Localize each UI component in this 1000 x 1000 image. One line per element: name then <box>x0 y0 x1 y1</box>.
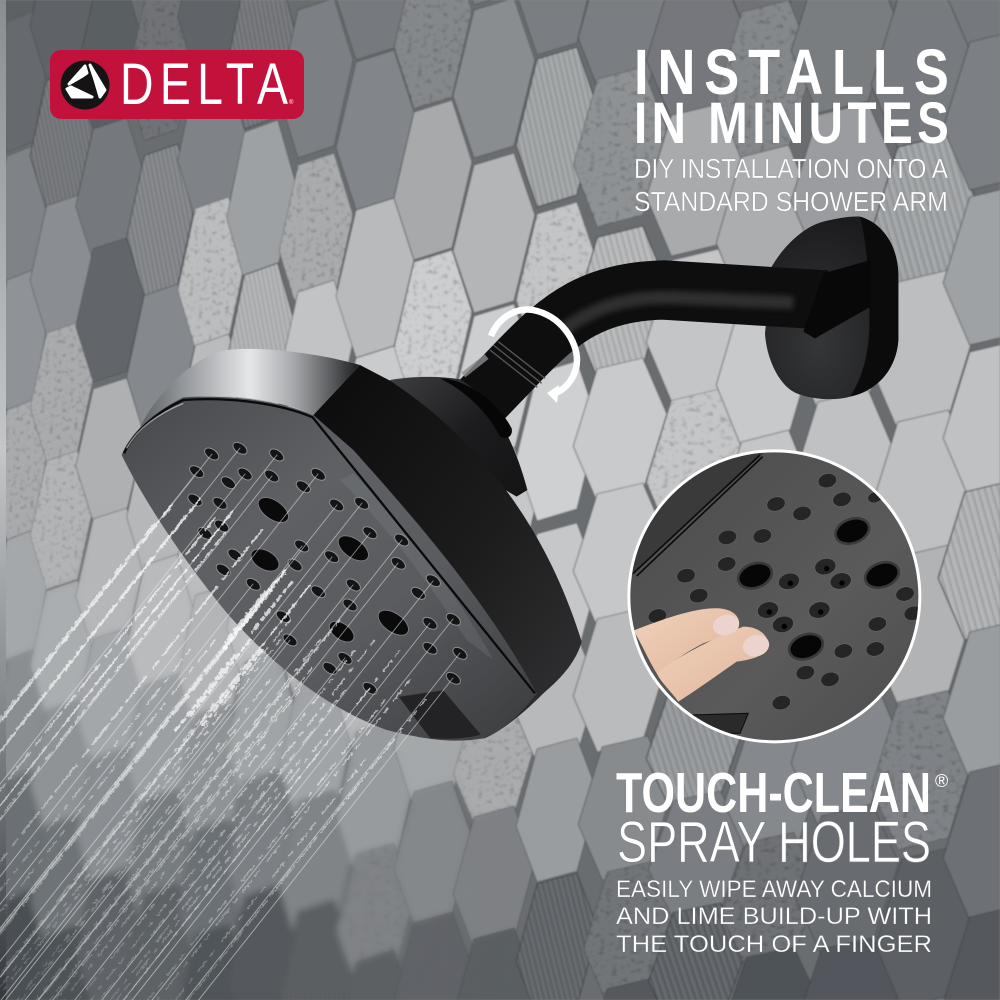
logo mark <box>67 65 105 97</box>
inset small holes <box>647 471 924 712</box>
text: installation description: STANDARD SHOWER ARM <box>634 186 948 217</box>
text: touch-clean description <box>616 876 932 958</box>
inset corner rim <box>632 453 763 576</box>
text: installation description: DIY INSTALLATION ONTO A <box>634 153 949 184</box>
heading: touch-clean spray holes: ® <box>935 771 948 791</box>
rim light line <box>127 403 183 448</box>
text: touch-clean description: AND LIME BUILD-UP WITH <box>616 903 932 930</box>
spray face <box>122 397 537 741</box>
logo registered mark: ® <box>289 99 294 106</box>
rotation arrow <box>491 310 577 403</box>
logo wordmark: DELTA <box>120 52 288 117</box>
text: touch-clean description: THE TOUCH OF A FINGER <box>616 931 932 958</box>
Delta logo <box>50 50 304 119</box>
inset large holes <box>735 514 902 664</box>
heading: installs in minutes <box>634 37 949 156</box>
heading: installs in minutes: INSTALLS <box>634 37 949 108</box>
shower arm and wall flange <box>463 217 898 403</box>
face sheen <box>340 473 493 660</box>
fingers <box>633 608 772 702</box>
heading: touch-clean spray holes <box>616 761 948 875</box>
flange hub <box>803 260 871 338</box>
left wall edge strip <box>0 0 6 1000</box>
large spray holes <box>247 492 413 646</box>
text: installation description <box>634 153 949 217</box>
inset nozzle centres <box>767 566 845 629</box>
thread rings <box>490 342 545 387</box>
background: blurred lower-left wall behind water <box>6 539 458 1000</box>
arm tube <box>478 290 827 403</box>
back housing <box>390 377 527 497</box>
flange plate <box>765 217 898 399</box>
neck highlight <box>463 357 487 375</box>
neck collar <box>440 378 512 438</box>
face rim highlight <box>124 399 535 693</box>
inset rim line <box>633 455 763 576</box>
text: touch-clean description: EASILY WIPE AWAY CALCIUM <box>616 876 932 903</box>
circular inset: touch-clean close-up <box>620 440 930 750</box>
flange dark edge <box>850 217 898 397</box>
spray nozzles <box>186 440 469 697</box>
chrome top edge <box>140 349 360 428</box>
shower head <box>122 349 582 741</box>
inset selector tab <box>690 713 748 733</box>
heading: installs in minutes: IN MINUTES <box>634 92 949 156</box>
selector tab <box>398 690 482 739</box>
rim band <box>313 365 582 739</box>
inset face <box>630 452 918 740</box>
arm highlight <box>563 297 793 330</box>
